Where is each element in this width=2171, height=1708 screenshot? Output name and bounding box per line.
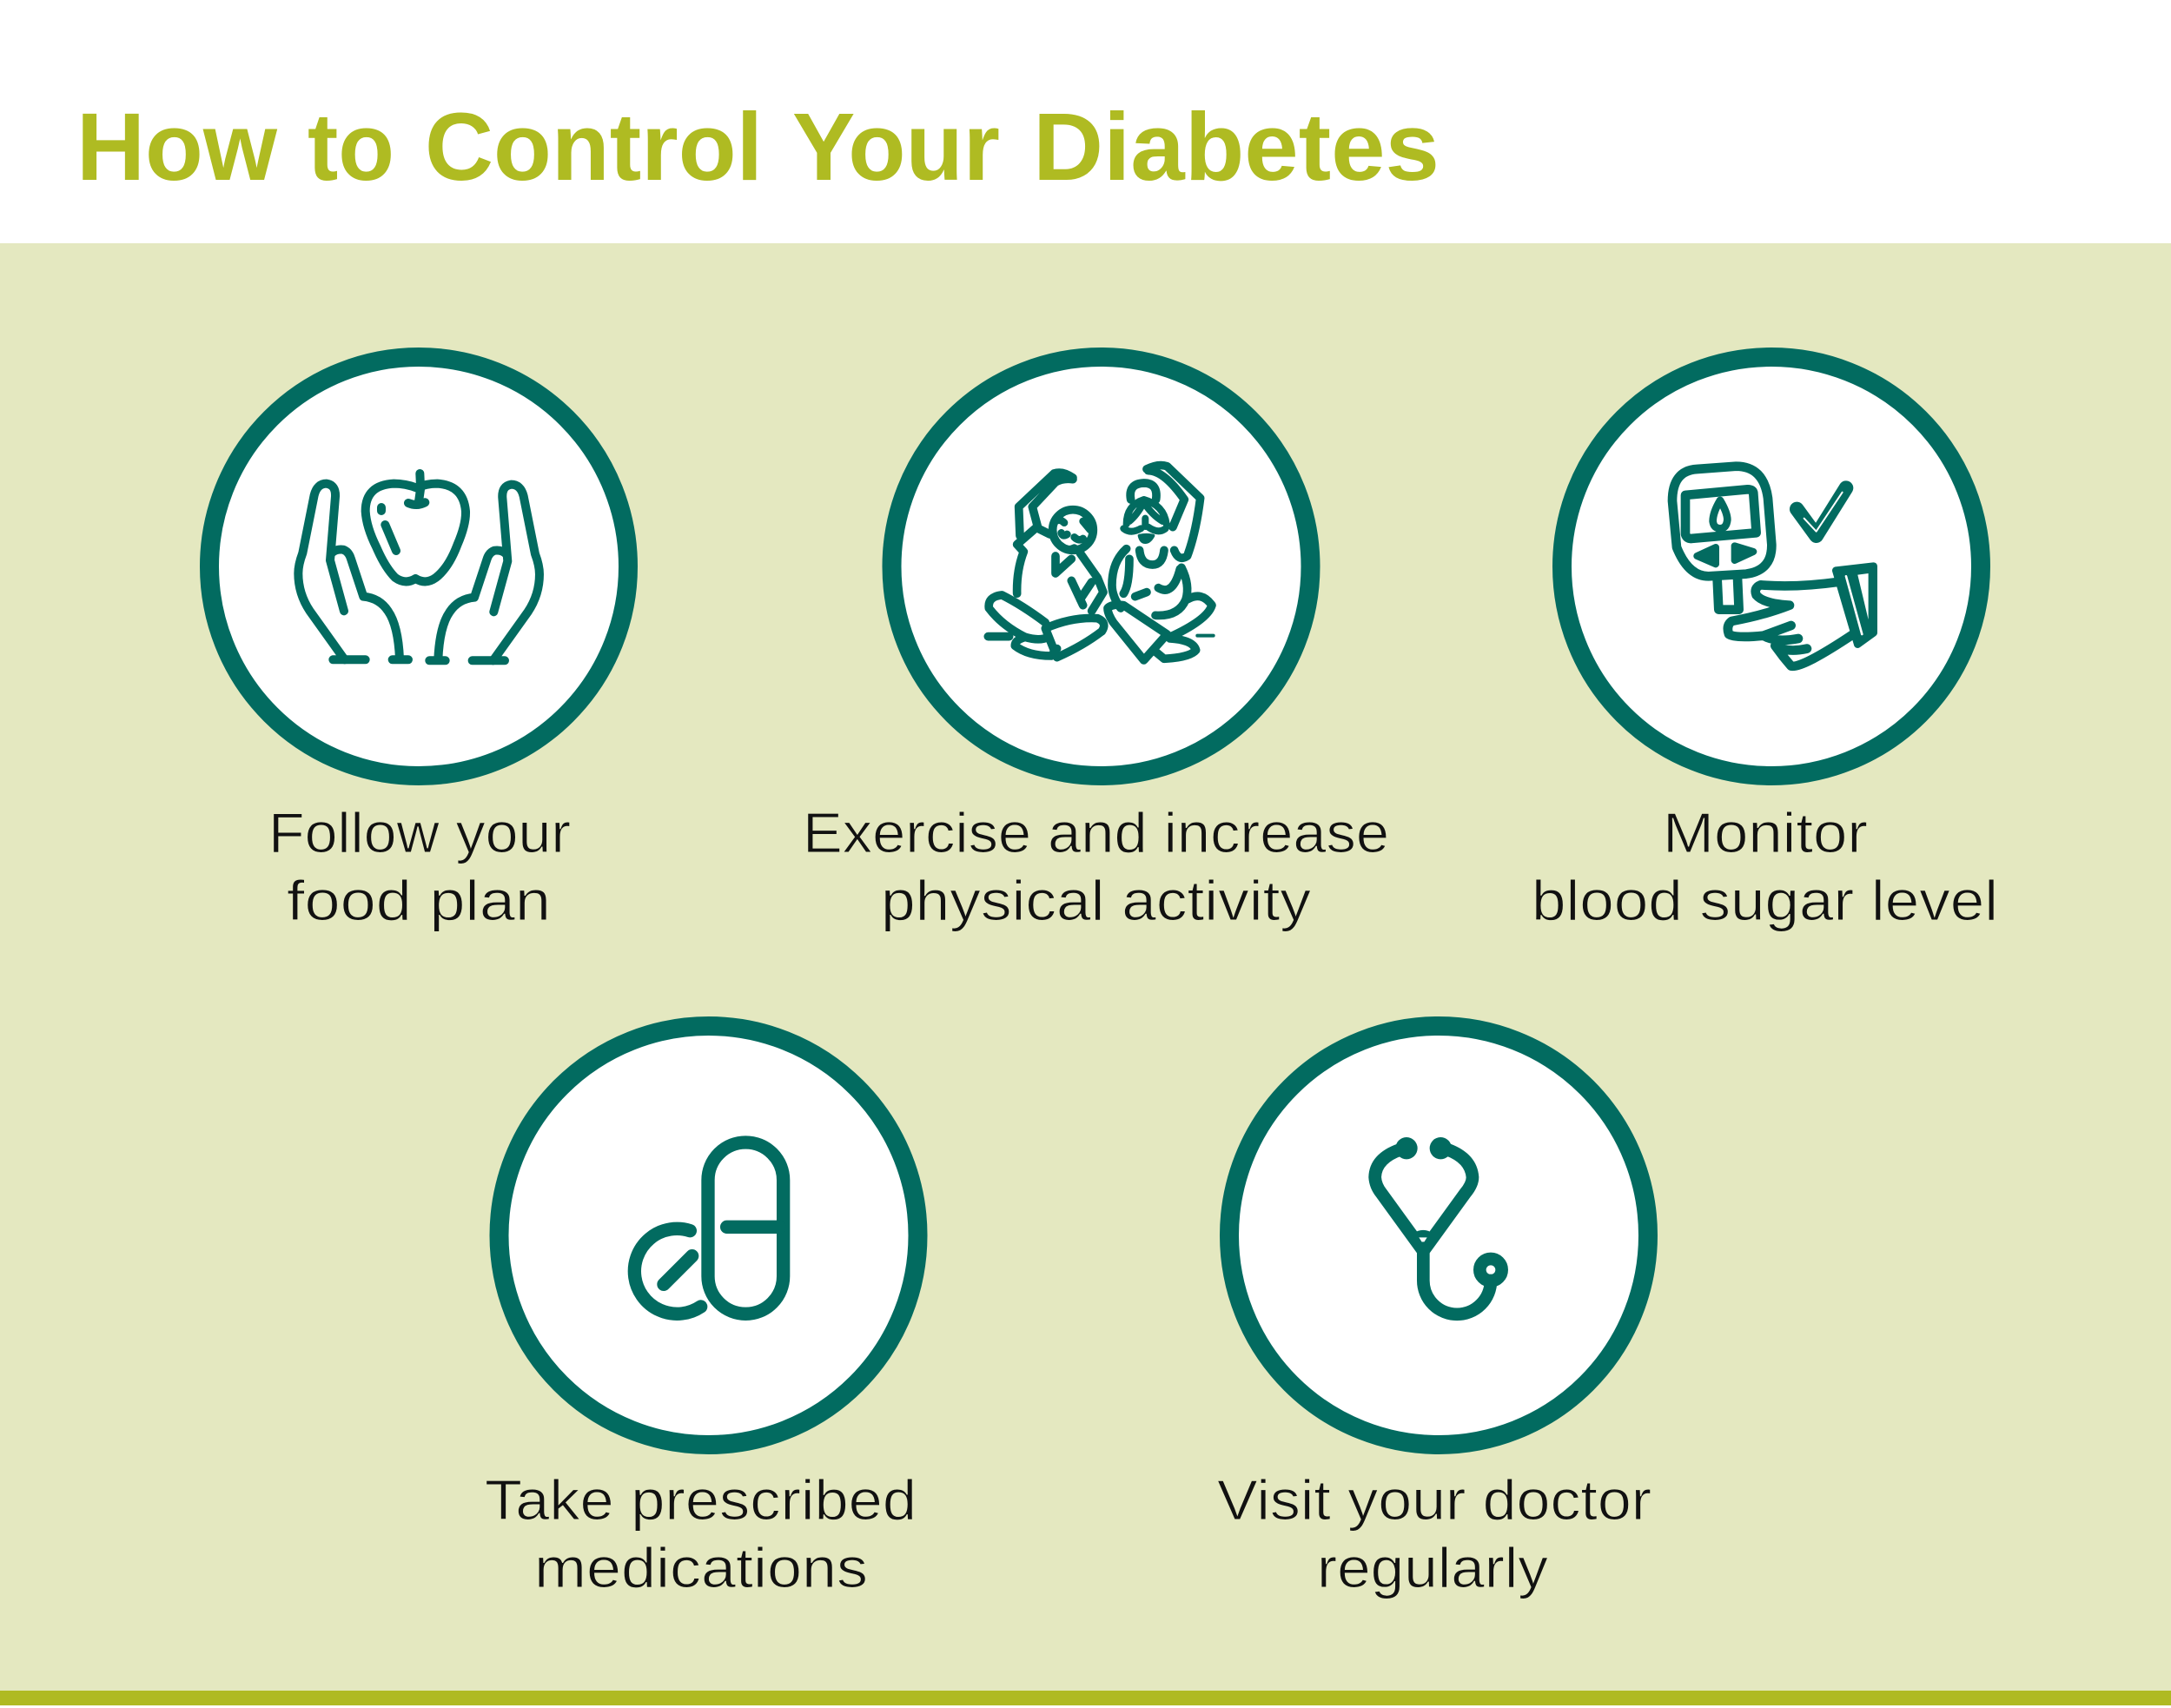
circle frame (1562, 357, 1981, 776)
icon: hands holding apple (298, 473, 539, 660)
label (1217, 1468, 1651, 1599)
icon: stethoscope (1375, 1137, 1502, 1314)
item: take medications (485, 1026, 917, 1599)
circle frame (891, 357, 1310, 776)
label: food plan (287, 869, 551, 932)
label: Follow your (268, 801, 571, 864)
title (76, 94, 1440, 201)
title: Your (792, 94, 1000, 201)
label (803, 801, 1389, 932)
label: physical activity (881, 869, 1312, 932)
title: to (308, 94, 394, 201)
label (268, 801, 571, 932)
label: Monitor (1663, 801, 1868, 864)
label (1532, 801, 1998, 932)
icon: capsule and tablet (634, 1142, 784, 1314)
title: Control (425, 94, 763, 201)
bottom bar (0, 1691, 2171, 1705)
icon: glucose meter and hand (1672, 467, 1874, 666)
circle frame (499, 1026, 917, 1445)
label: blood sugar level (1532, 869, 1998, 932)
circle frame (1229, 1026, 1648, 1445)
label: Visit your doctor (1217, 1468, 1651, 1532)
item: follow your food plan (209, 357, 628, 932)
icon: two people exercising (988, 466, 1214, 660)
circle frame (209, 357, 628, 776)
item: exercise (803, 357, 1389, 932)
label: Exercise and increase (803, 801, 1389, 864)
title: Diabetes (1033, 94, 1440, 201)
item: visit doctor (1217, 1026, 1651, 1599)
label: Take prescribed (485, 1468, 917, 1532)
label: regularly (1317, 1536, 1549, 1599)
label: medications (534, 1536, 868, 1599)
item: monitor blood sugar (1532, 357, 1998, 932)
label (485, 1468, 917, 1599)
title: How (76, 94, 277, 201)
